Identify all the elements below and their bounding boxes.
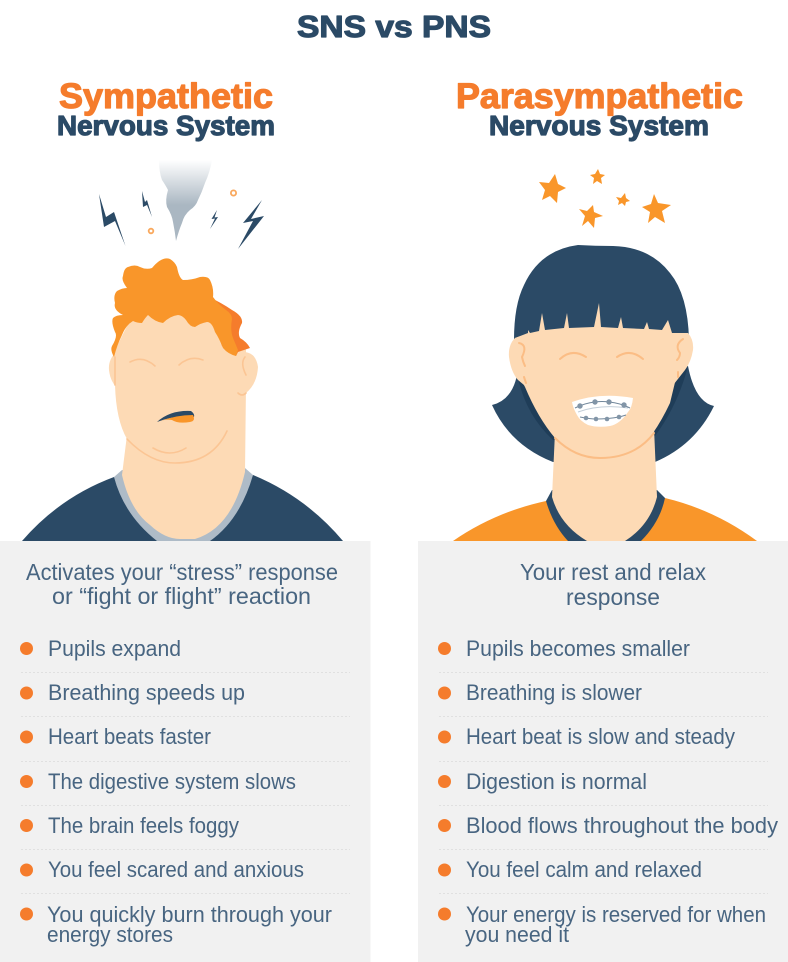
man's hair [111, 258, 238, 357]
man's hair, dark underlayer [205, 295, 250, 356]
woman's shirt [453, 498, 757, 541]
bullet list: The brain feels foggy [48, 813, 239, 838]
woman's ears [509, 333, 693, 390]
icon: lightning bolts [99, 191, 264, 249]
man's mouth [157, 411, 194, 423]
panel intro [26, 559, 338, 609]
facial lines [115, 357, 246, 463]
bullet list: You feel scared and anxious [48, 857, 304, 882]
title: SNS vs PNS [297, 9, 491, 44]
bullet list: You quickly burn through your [47, 902, 332, 927]
hair shadow [518, 366, 688, 440]
woman's lower hair [492, 366, 714, 462]
woman's facial lines [519, 339, 683, 458]
panel: parasympathetic responses [418, 541, 788, 962]
woman's collar [546, 490, 665, 541]
bullet list: Blood flows throughout the body [466, 813, 778, 838]
bullet list: you need it [465, 922, 569, 947]
heading: parasympathetic nervous system: Parasympathetic [456, 77, 743, 116]
heading: sympathetic nervous system: Nervous System [57, 110, 275, 141]
bullet list [438, 636, 778, 947]
bullet list: Pupils becomes smaller [466, 636, 690, 661]
bullet list: Breathing speeds up [48, 680, 245, 705]
panel intro: Activates your “stress” response [26, 559, 338, 585]
heading: parasympathetic nervous system: Nervous System [489, 110, 709, 141]
bullet list: Heart beat is slow and steady [466, 724, 735, 749]
panel: sympathetic responses [0, 541, 370, 962]
man's shirt [22, 475, 343, 541]
heading: parasympathetic nervous system [456, 77, 743, 141]
panel intro: Your rest and relax [520, 559, 706, 585]
panel intro [520, 559, 706, 610]
bullet list: Breathing is slower [466, 680, 642, 705]
heading: sympathetic nervous system: Sympathetic [59, 77, 273, 116]
illustration: stressed man [22, 258, 343, 541]
icon: small orange circles [149, 190, 236, 233]
bullet list: Pupils expand [48, 636, 181, 661]
illustration: relaxed woman [453, 245, 757, 541]
icon: tornado above the man's head [159, 160, 212, 241]
bullet list: Digestion is normal [466, 769, 647, 794]
bullet list: You feel calm and relaxed [466, 857, 702, 882]
bullet list: energy stores [47, 922, 173, 947]
bullet list [20, 636, 332, 947]
bullet list: Your energy is reserved for when [466, 902, 766, 927]
man's collar [114, 468, 253, 541]
woman's upper hair [514, 245, 689, 340]
woman's smile with braces [572, 396, 633, 427]
woman's face with fringe [515, 303, 688, 458]
bullet list: The digestive system slows [48, 769, 296, 794]
panel intro: response [566, 584, 660, 610]
bullet list: Heart beats faster [48, 724, 211, 749]
heading: sympathetic nervous system [57, 77, 275, 141]
icon: orange stars [539, 169, 671, 228]
man's face [115, 300, 246, 463]
woman's neck [552, 428, 657, 541]
man's neck [122, 385, 246, 539]
panel intro: or “fight or flight” reaction [52, 583, 311, 609]
man's ears [109, 352, 258, 393]
